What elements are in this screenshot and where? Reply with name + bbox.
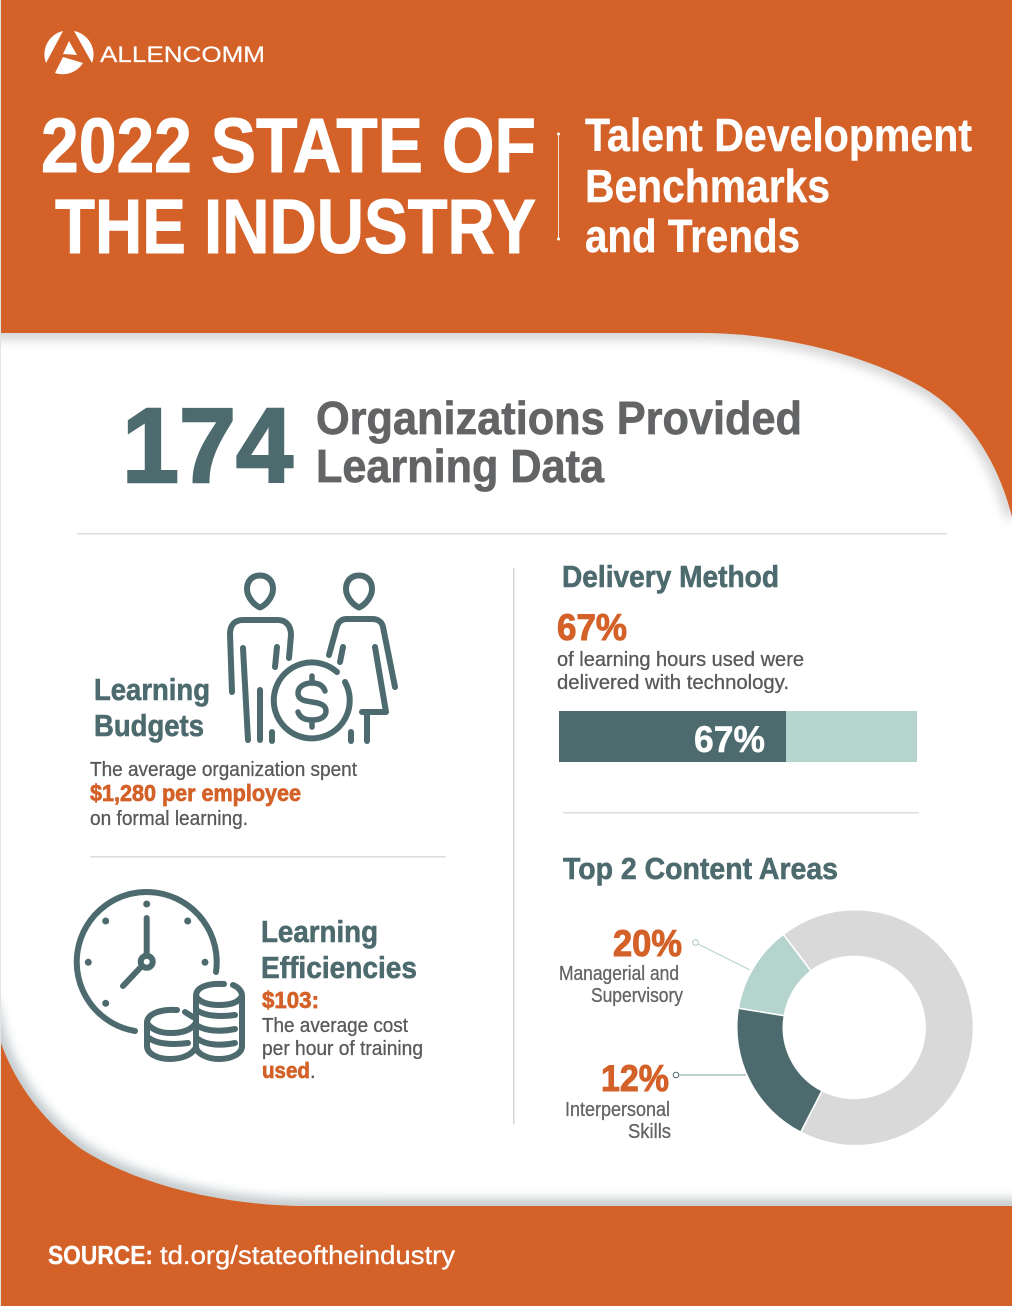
panel: learning efficiencies — [77, 892, 423, 1083]
panel: delivery method — [557, 559, 917, 762]
heading: learning efficiencies: Learning — [261, 914, 378, 949]
text: delivery description — [557, 649, 804, 694]
subtitle: Talent Development — [585, 109, 972, 161]
source footer — [48, 1240, 455, 1270]
title: 2022 STATE OF — [41, 103, 536, 189]
heading: learning efficiencies: Efficiencies — [261, 950, 417, 985]
callout: managerial and supervisory — [559, 923, 750, 1007]
heading: top 2 content areas: Top 2 Content Areas — [563, 851, 838, 886]
text: budget stat — [90, 759, 357, 830]
heading: delivery method: Delivery Method — [562, 559, 779, 594]
text: budget stat: $1,280 per employee — [90, 780, 301, 806]
title: THE INDUSTRY — [55, 184, 536, 270]
text: efficiencies stat: used — [262, 1058, 310, 1083]
title — [41, 103, 536, 270]
subtitle: Benchmarks — [585, 160, 830, 212]
callout: interpersonal skills: 12% — [601, 1058, 669, 1099]
text: efficiencies stat: $103: — [262, 987, 319, 1013]
text: budget stat: The average organization spent — [90, 759, 357, 781]
bar chart: 67%: 67% — [694, 719, 765, 760]
white content panel — [0, 333, 1012, 1206]
callout: interpersonal skills — [565, 1058, 746, 1143]
stat: 174 organizations: Learning Data — [316, 440, 604, 492]
bar chart: 67% — [559, 711, 917, 762]
subtitle — [585, 109, 972, 262]
heading: learning budgets: Budgets — [94, 708, 204, 743]
text: efficiencies stat — [262, 987, 423, 1083]
stat: 67%: 67% — [557, 607, 627, 648]
callout: managerial and supervisory: 20% — [613, 923, 682, 964]
icon: people with dollar coin — [230, 576, 395, 741]
source footer: td.org/stateoftheindustry — [160, 1240, 455, 1270]
logo: Allencomm — [44, 31, 265, 74]
callout: managerial and supervisory: Managerial and — [559, 963, 679, 985]
callout: interpersonal skills: Skills — [628, 1121, 671, 1143]
subtitle: and Trends — [585, 210, 800, 262]
header divider — [557, 132, 560, 240]
text: budget stat: on formal learning. — [90, 808, 248, 830]
panel: top 2 content areas — [559, 851, 973, 1146]
panel inner shadow — [0, 333, 1012, 1206]
text: efficiencies stat: per hour of training — [262, 1038, 423, 1060]
logo: Allencomm: ALLENCOMM — [100, 42, 265, 67]
panel: learning budgets — [90, 576, 395, 830]
heading: learning budgets — [94, 672, 210, 743]
stat: 174 organizations: Organizations Provided — [316, 392, 802, 444]
donut chart — [737, 910, 973, 1146]
icon: clock with coins — [77, 892, 242, 1059]
heading: learning budgets: Learning — [94, 672, 210, 707]
callout: managerial and supervisory: Supervisory — [591, 985, 683, 1007]
text: delivery description: delivered with technology. — [557, 672, 789, 694]
heading: learning efficiencies — [261, 914, 417, 985]
stat: 174 organizations: 174 — [122, 387, 293, 505]
text: efficiencies stat: The average cost — [262, 1015, 408, 1037]
stat: 174 organizations — [122, 387, 802, 505]
source footer: SOURCE: — [48, 1240, 153, 1270]
callout: interpersonal skills: Interpersonal — [565, 1099, 670, 1121]
text: efficiencies stat: . — [310, 1061, 316, 1083]
text: delivery description: of learning hours used were — [557, 649, 804, 671]
